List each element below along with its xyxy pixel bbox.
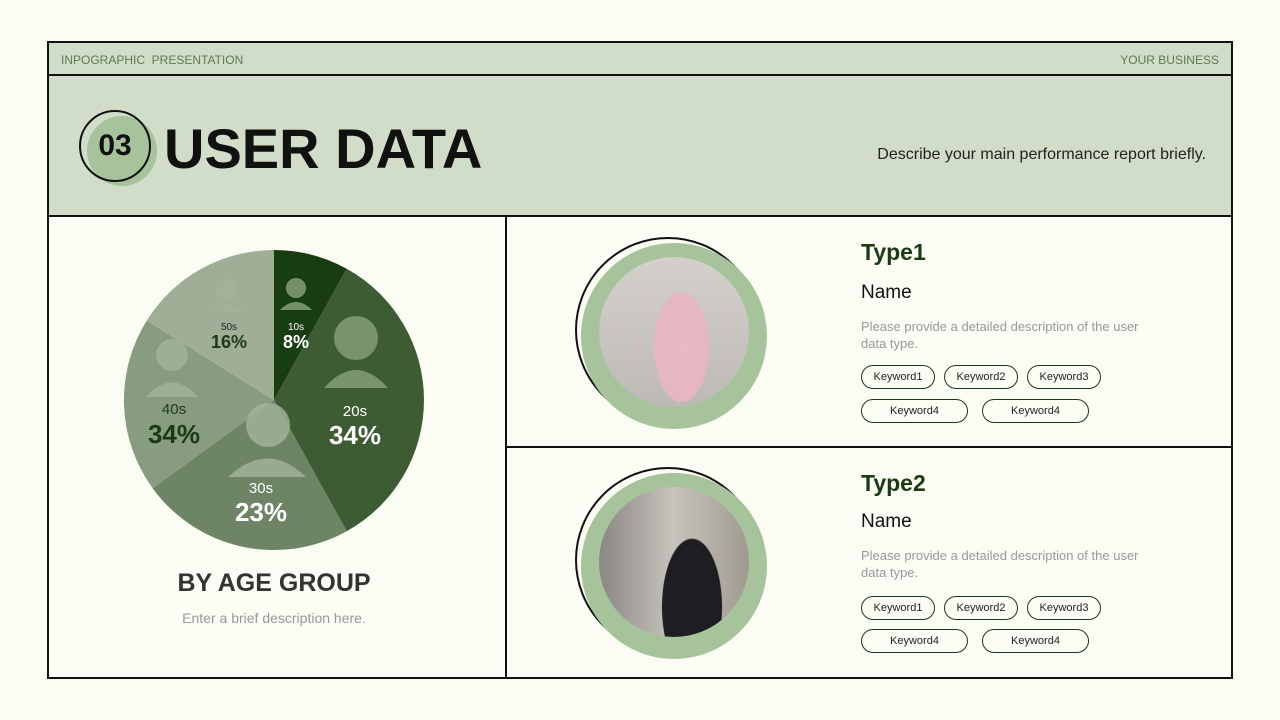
keywords: Keyword4 [1011, 405, 1060, 417]
pie labels: 20s [343, 403, 367, 420]
top bar [47, 41, 1233, 76]
keywords: Keyword4 [1011, 635, 1060, 647]
title band [47, 74, 1233, 217]
keywords: Keyword1 [874, 371, 922, 383]
top bar right text: YOUR BUSINESS [1120, 53, 1219, 67]
pie labels: 8% [283, 332, 309, 352]
keywords: Keyword3 [1040, 602, 1088, 614]
keywords: Keyword4 [890, 405, 939, 417]
name: Name [861, 511, 912, 532]
description [861, 319, 1139, 351]
description: Please provide a detailed description of the user [861, 548, 1139, 563]
description: data type. [861, 565, 918, 580]
pie labels: 10s [288, 322, 304, 333]
type heading: Type2 [861, 470, 926, 496]
pie labels: 23% [235, 497, 287, 527]
subtitle: Describe your main performance report briefly. [877, 146, 1206, 163]
keywords: Keyword1 [874, 602, 922, 614]
panel dividers [505, 215, 507, 679]
pie labels: 16% [211, 332, 247, 352]
pie labels [148, 322, 381, 527]
keywords: Keyword2 [957, 371, 1005, 383]
keywords: Keyword4 [890, 635, 939, 647]
chart description: Enter a brief description here. [182, 610, 366, 626]
type heading: Type1 [861, 239, 926, 265]
keywords: Keyword3 [1040, 371, 1088, 383]
keywords: Keyword2 [957, 602, 1005, 614]
top bar left text: INPOGRAPHIC PRESENTATION [61, 53, 243, 67]
panel: pie chart [124, 250, 424, 626]
title: USER DATA [164, 117, 482, 180]
pie chart [124, 250, 424, 550]
number badge [79, 110, 157, 186]
number badge: 03 [98, 129, 132, 162]
pie labels: 40s [162, 401, 186, 418]
icons: people silhouettes [280, 278, 388, 388]
pie labels: 34% [329, 420, 381, 450]
pie labels: 34% [148, 419, 200, 449]
name: Name [861, 282, 912, 303]
description: data type. [861, 336, 918, 351]
panel: type1 [575, 237, 1139, 429]
pie labels: 30s [249, 480, 273, 497]
photo circle [575, 237, 767, 429]
keywords [861, 596, 1101, 653]
description: Please provide a detailed description of the user [861, 319, 1139, 334]
panel: type2 [575, 467, 1139, 659]
chart heading: BY AGE GROUP [177, 569, 371, 597]
description [861, 548, 1139, 580]
pie labels: 50s [221, 322, 237, 333]
photo circle [575, 467, 767, 659]
keywords [861, 365, 1101, 423]
